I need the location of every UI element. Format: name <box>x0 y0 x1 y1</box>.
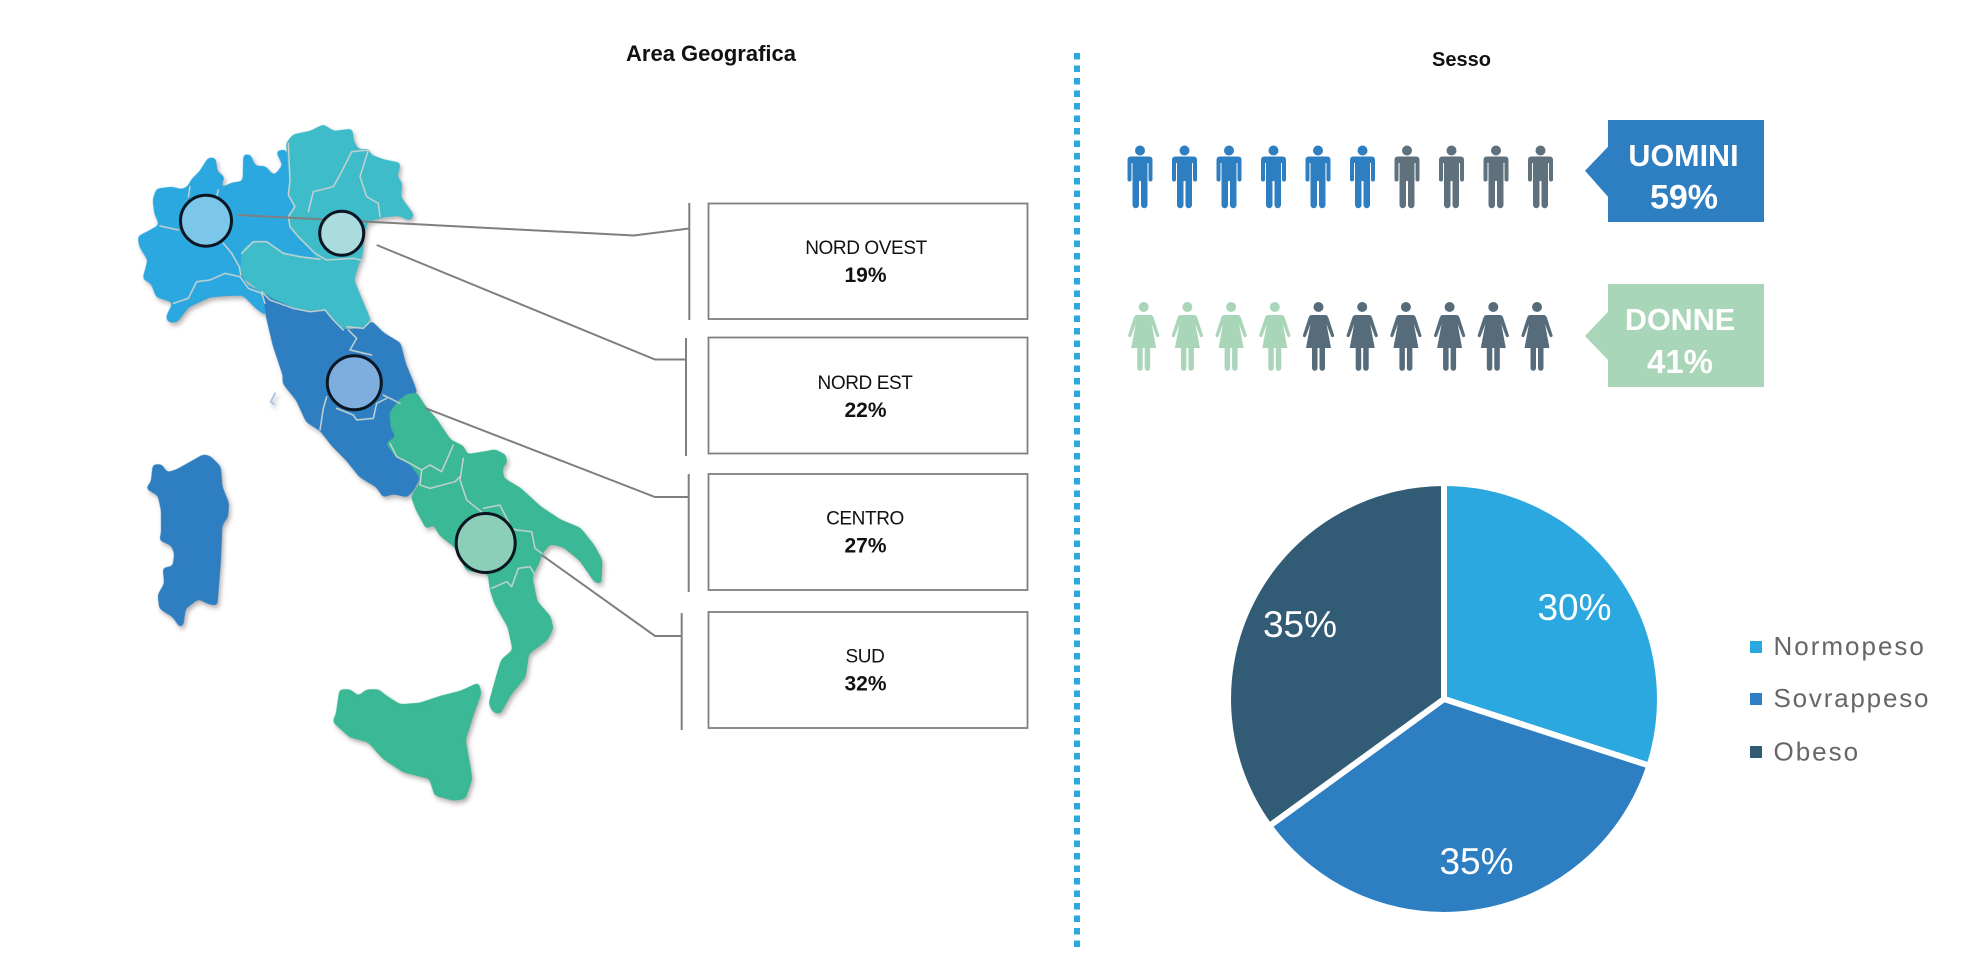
box: Nord Est <box>708 338 1028 454</box>
callout: Uomini: 59% <box>1650 178 1718 216</box>
box: Centro: 27% <box>844 534 887 558</box>
pictogram: women 41% <box>1128 302 1553 371</box>
callout: Uomini <box>1585 120 1764 222</box>
island: Sicilia <box>333 683 481 800</box>
legend: Obeso <box>1774 736 1860 766</box>
title: Sesso: Sesso <box>1432 49 1491 71</box>
legend: Sovrappeso <box>1774 683 1930 713</box>
connector: Nord Ovest <box>238 203 689 320</box>
slice: Sovrappeso 35% <box>1269 699 1649 915</box>
callout: Donne <box>1585 284 1764 387</box>
region: Sud <box>387 393 602 713</box>
regional borders <box>160 143 542 588</box>
box: Sud: 32% <box>844 672 887 696</box>
box: Nord Ovest: NORD OVEST <box>805 238 928 259</box>
marker: Centro <box>327 356 381 410</box>
marker: Nord Est <box>320 211 364 255</box>
box: Sud <box>708 612 1028 728</box>
box: Nord Est: NORD EST <box>818 373 913 394</box>
pie chart <box>1228 483 1660 915</box>
region: Nord Ovest <box>138 150 320 322</box>
slice: Obeso 35% <box>1228 483 1444 826</box>
box: Centro <box>708 474 1028 590</box>
box: Nord Ovest <box>708 204 1028 319</box>
connector: Sud <box>542 555 682 730</box>
island: Sardegna <box>147 455 228 627</box>
box: Nord Est: 22% <box>844 399 887 422</box>
region: Centro <box>263 292 420 497</box>
legend: Normopeso <box>1774 631 1926 661</box>
marker: Sud <box>456 514 515 572</box>
legend <box>1750 631 1930 766</box>
island: Elba <box>271 393 275 404</box>
box: Centro: CENTRO <box>826 508 904 530</box>
pie label: 30%: 30% <box>1537 587 1612 628</box>
callout: Donne: 41% <box>1647 343 1713 380</box>
title: Area Geografica: Area Geografica <box>626 41 797 66</box>
region: Nord Est <box>241 125 413 330</box>
connector: Nord Est <box>377 245 686 456</box>
pictogram: men 59% <box>1128 146 1553 208</box>
slice: Normopeso 30% <box>1444 483 1660 766</box>
connector: Centro <box>425 408 689 592</box>
callout: Uomini: UOMINI <box>1628 139 1739 173</box>
marker: Nord Ovest <box>180 195 232 246</box>
box: Sud: SUD <box>846 646 884 668</box>
box: Nord Ovest: 19% <box>844 264 887 287</box>
map of Italy <box>138 125 602 800</box>
pie label: 35% Obeso: 35% <box>1263 604 1337 645</box>
pie label: 35% Sovrappeso: 35% <box>1439 841 1514 882</box>
callout: Donne: DONNE <box>1625 303 1735 337</box>
